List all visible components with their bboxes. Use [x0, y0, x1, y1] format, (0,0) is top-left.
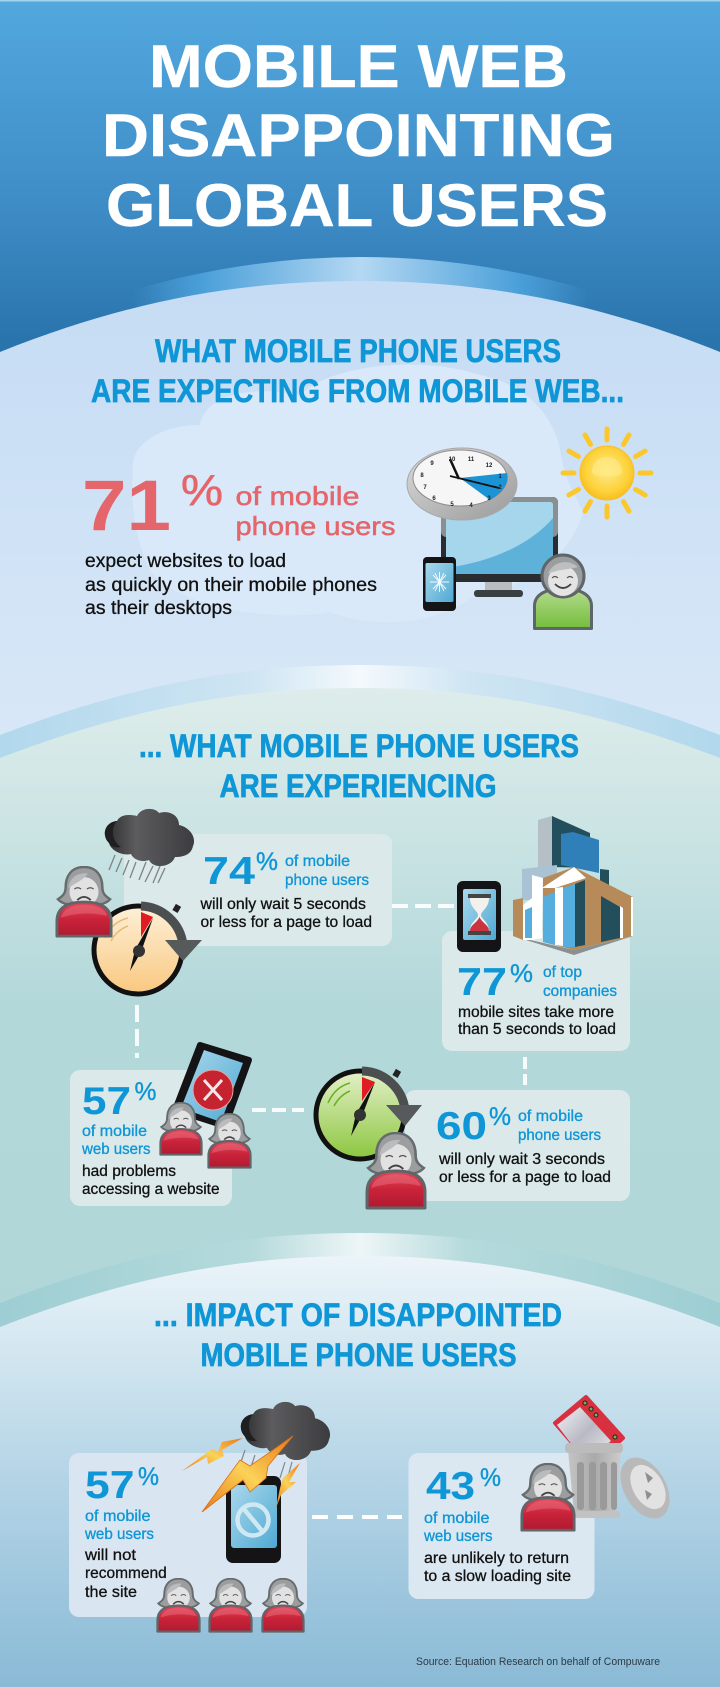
icon: wall clock: 2: [498, 485, 502, 491]
panel: 74 percent: phone users: [285, 872, 369, 889]
heading: experiencing: ARE EXPERIENCING: [220, 768, 496, 804]
panel: 60 percent: will only wait 3 seconds: [438, 1151, 605, 1168]
panel: 77 percent: [442, 931, 630, 1051]
panel: 43 percent: %: [480, 1464, 501, 1492]
panel: impact section background: [0, 1256, 720, 1687]
panel: 74 percent: of mobile: [285, 853, 350, 870]
icon: wall clock: 10: [449, 457, 456, 463]
stat: 71 percent: %: [181, 466, 223, 515]
title: DISAPPOINTING: [102, 102, 615, 169]
title: GLOBAL USERS: [106, 172, 608, 239]
heading: experiencing: ... WHAT MOBILE PHONE USERS: [139, 728, 579, 764]
panel: 60 percent: [405, 1090, 630, 1201]
icon: sad user large: [367, 1133, 425, 1208]
panel: 57 percent access: had problems: [82, 1163, 176, 1180]
icon: stopwatch peach: [94, 904, 202, 994]
icon: wall clock: 11: [468, 457, 475, 463]
panel: 57 percent recommend: recommend: [85, 1565, 167, 1582]
icon: wall clock: 9: [430, 461, 434, 467]
panel: 60 percent: %: [489, 1103, 511, 1131]
top edge strip: [0, 0, 720, 2]
arc band 2: [0, 665, 720, 800]
text: expectation: as their desktops: [85, 598, 232, 619]
connector dashes impact: [312, 1515, 402, 1519]
icon: sad user with trash: [522, 1464, 574, 1530]
icon: wall clock: 1: [498, 474, 502, 480]
panel: 57 percent access: of mobile: [82, 1123, 147, 1140]
panel: 77 percent: companies: [543, 983, 617, 1000]
icon: three sad users: [158, 1579, 304, 1632]
header band: [0, 0, 720, 400]
icon: trash can: [565, 1443, 680, 1527]
icon: blocked phone: [226, 1476, 281, 1563]
icon: desktop monitor: [441, 497, 558, 597]
panel: expecting section background: [0, 281, 720, 800]
icon: office buildings: [513, 816, 633, 955]
icon: wall clock: 8: [420, 473, 424, 479]
icon: wall clock: [407, 448, 517, 520]
icon: hourglass phone: [457, 881, 501, 952]
stat: 71 percent: [82, 466, 396, 546]
panel: 43 percent: to a slow loading site: [424, 1568, 571, 1585]
icon: sun: [563, 429, 651, 517]
panel: 77 percent: mobile sites take more: [458, 1004, 614, 1021]
icon: wall clock: 3: [487, 496, 491, 502]
panel: 43 percent: [408, 1453, 594, 1599]
icon: wall clock: 12: [486, 463, 493, 469]
panel: 74 percent: [124, 834, 392, 946]
icon: phone with error: [175, 1045, 249, 1126]
source note: Source: Equation Research on behalf of Compuware: [416, 1656, 660, 1668]
panel: 60 percent: or less for a page to load: [439, 1169, 611, 1186]
panel: 57 percent access: %: [134, 1078, 156, 1106]
panel: 57 percent recommend: %: [138, 1463, 159, 1491]
text: expectation: [85, 551, 377, 619]
heading: expecting: ARE EXPECTING FROM MOBILE WEB...: [91, 373, 624, 409]
panel: 57 percent recommend: [69, 1453, 307, 1617]
panel: 74 percent: will only wait 5 seconds: [200, 896, 366, 913]
panel: 77 percent: than 5 seconds to load: [458, 1021, 616, 1038]
panel: 43 percent: of mobile: [424, 1510, 490, 1527]
panel: 43 percent: are unlikely to return: [424, 1550, 569, 1567]
panel: 60 percent: 60: [436, 1105, 487, 1148]
icon: wall clock: 4: [469, 503, 473, 509]
stat: 71 percent: phone users: [236, 511, 396, 541]
icon: happy user: [534, 555, 592, 628]
heading: impact: [154, 1297, 562, 1373]
icon: rain cloud: [105, 809, 194, 883]
panel: experiencing section background: [0, 688, 720, 1400]
heading: impact: MOBILE PHONE USERS: [200, 1337, 516, 1373]
icon: stopwatch green: [316, 1069, 422, 1159]
icon: lightning bolts: [182, 1436, 300, 1512]
text: expectation: as quickly on their mobile phones: [85, 575, 377, 596]
panel: 57 percent recommend: the site: [85, 1584, 137, 1601]
panel: 57 percent recommend: will not: [84, 1547, 137, 1564]
panel: 74 percent: 74: [203, 850, 255, 893]
panel: 74 percent: or less for a page to load: [200, 914, 372, 931]
text: expectation: expect websites to load: [85, 551, 286, 572]
title: [102, 33, 615, 239]
panel: 57 percent access: [70, 1070, 232, 1206]
stat: 71 percent: of mobile: [236, 481, 360, 511]
panel: 43 percent: 43: [426, 1465, 475, 1508]
panel: 57 percent recommend: 57: [85, 1464, 134, 1507]
heading: experiencing: [139, 728, 579, 804]
panel: 74 percent: %: [256, 848, 278, 876]
connector dashes: [137, 906, 525, 1110]
arc band 3: [0, 1233, 720, 1400]
panel: 77 percent: of top: [543, 964, 582, 981]
icon: loading phone: [423, 557, 456, 611]
panel: 57 percent access: 57: [82, 1080, 131, 1123]
icon: wall clock: 5: [450, 502, 454, 508]
panel: 77 percent: %: [510, 960, 533, 988]
panel: 60 percent: of mobile: [518, 1108, 583, 1125]
panel: 57 percent recommend: of mobile: [85, 1508, 151, 1525]
icon: discarded device: [555, 1397, 623, 1466]
panel: 77 percent: 77: [457, 961, 507, 1004]
heading: expecting: [91, 333, 624, 409]
panel: 57 percent recommend: web users: [84, 1526, 154, 1543]
heading: expecting: WHAT MOBILE PHONE USERS: [155, 333, 561, 369]
icon: two sad users: [160, 1103, 250, 1168]
icon: sad user: [57, 867, 111, 936]
background cloud: [132, 365, 583, 622]
icon: wall clock: 6: [432, 496, 436, 502]
panel: 57 percent access: web users: [81, 1141, 150, 1158]
panel: 43 percent: web users: [423, 1528, 492, 1545]
icon: wall clock: 7: [423, 485, 427, 491]
panel: 60 percent: phone users: [518, 1127, 601, 1144]
heading: impact: ... IMPACT OF DISAPPOINTED: [154, 1297, 562, 1333]
icon: storm cloud: [240, 1402, 330, 1480]
arc highlight 1: [133, 257, 588, 330]
panel: 57 percent access: accessing a website: [82, 1181, 220, 1198]
title: MOBILE WEB: [149, 33, 568, 100]
stat: 71 percent: 71: [82, 467, 171, 546]
